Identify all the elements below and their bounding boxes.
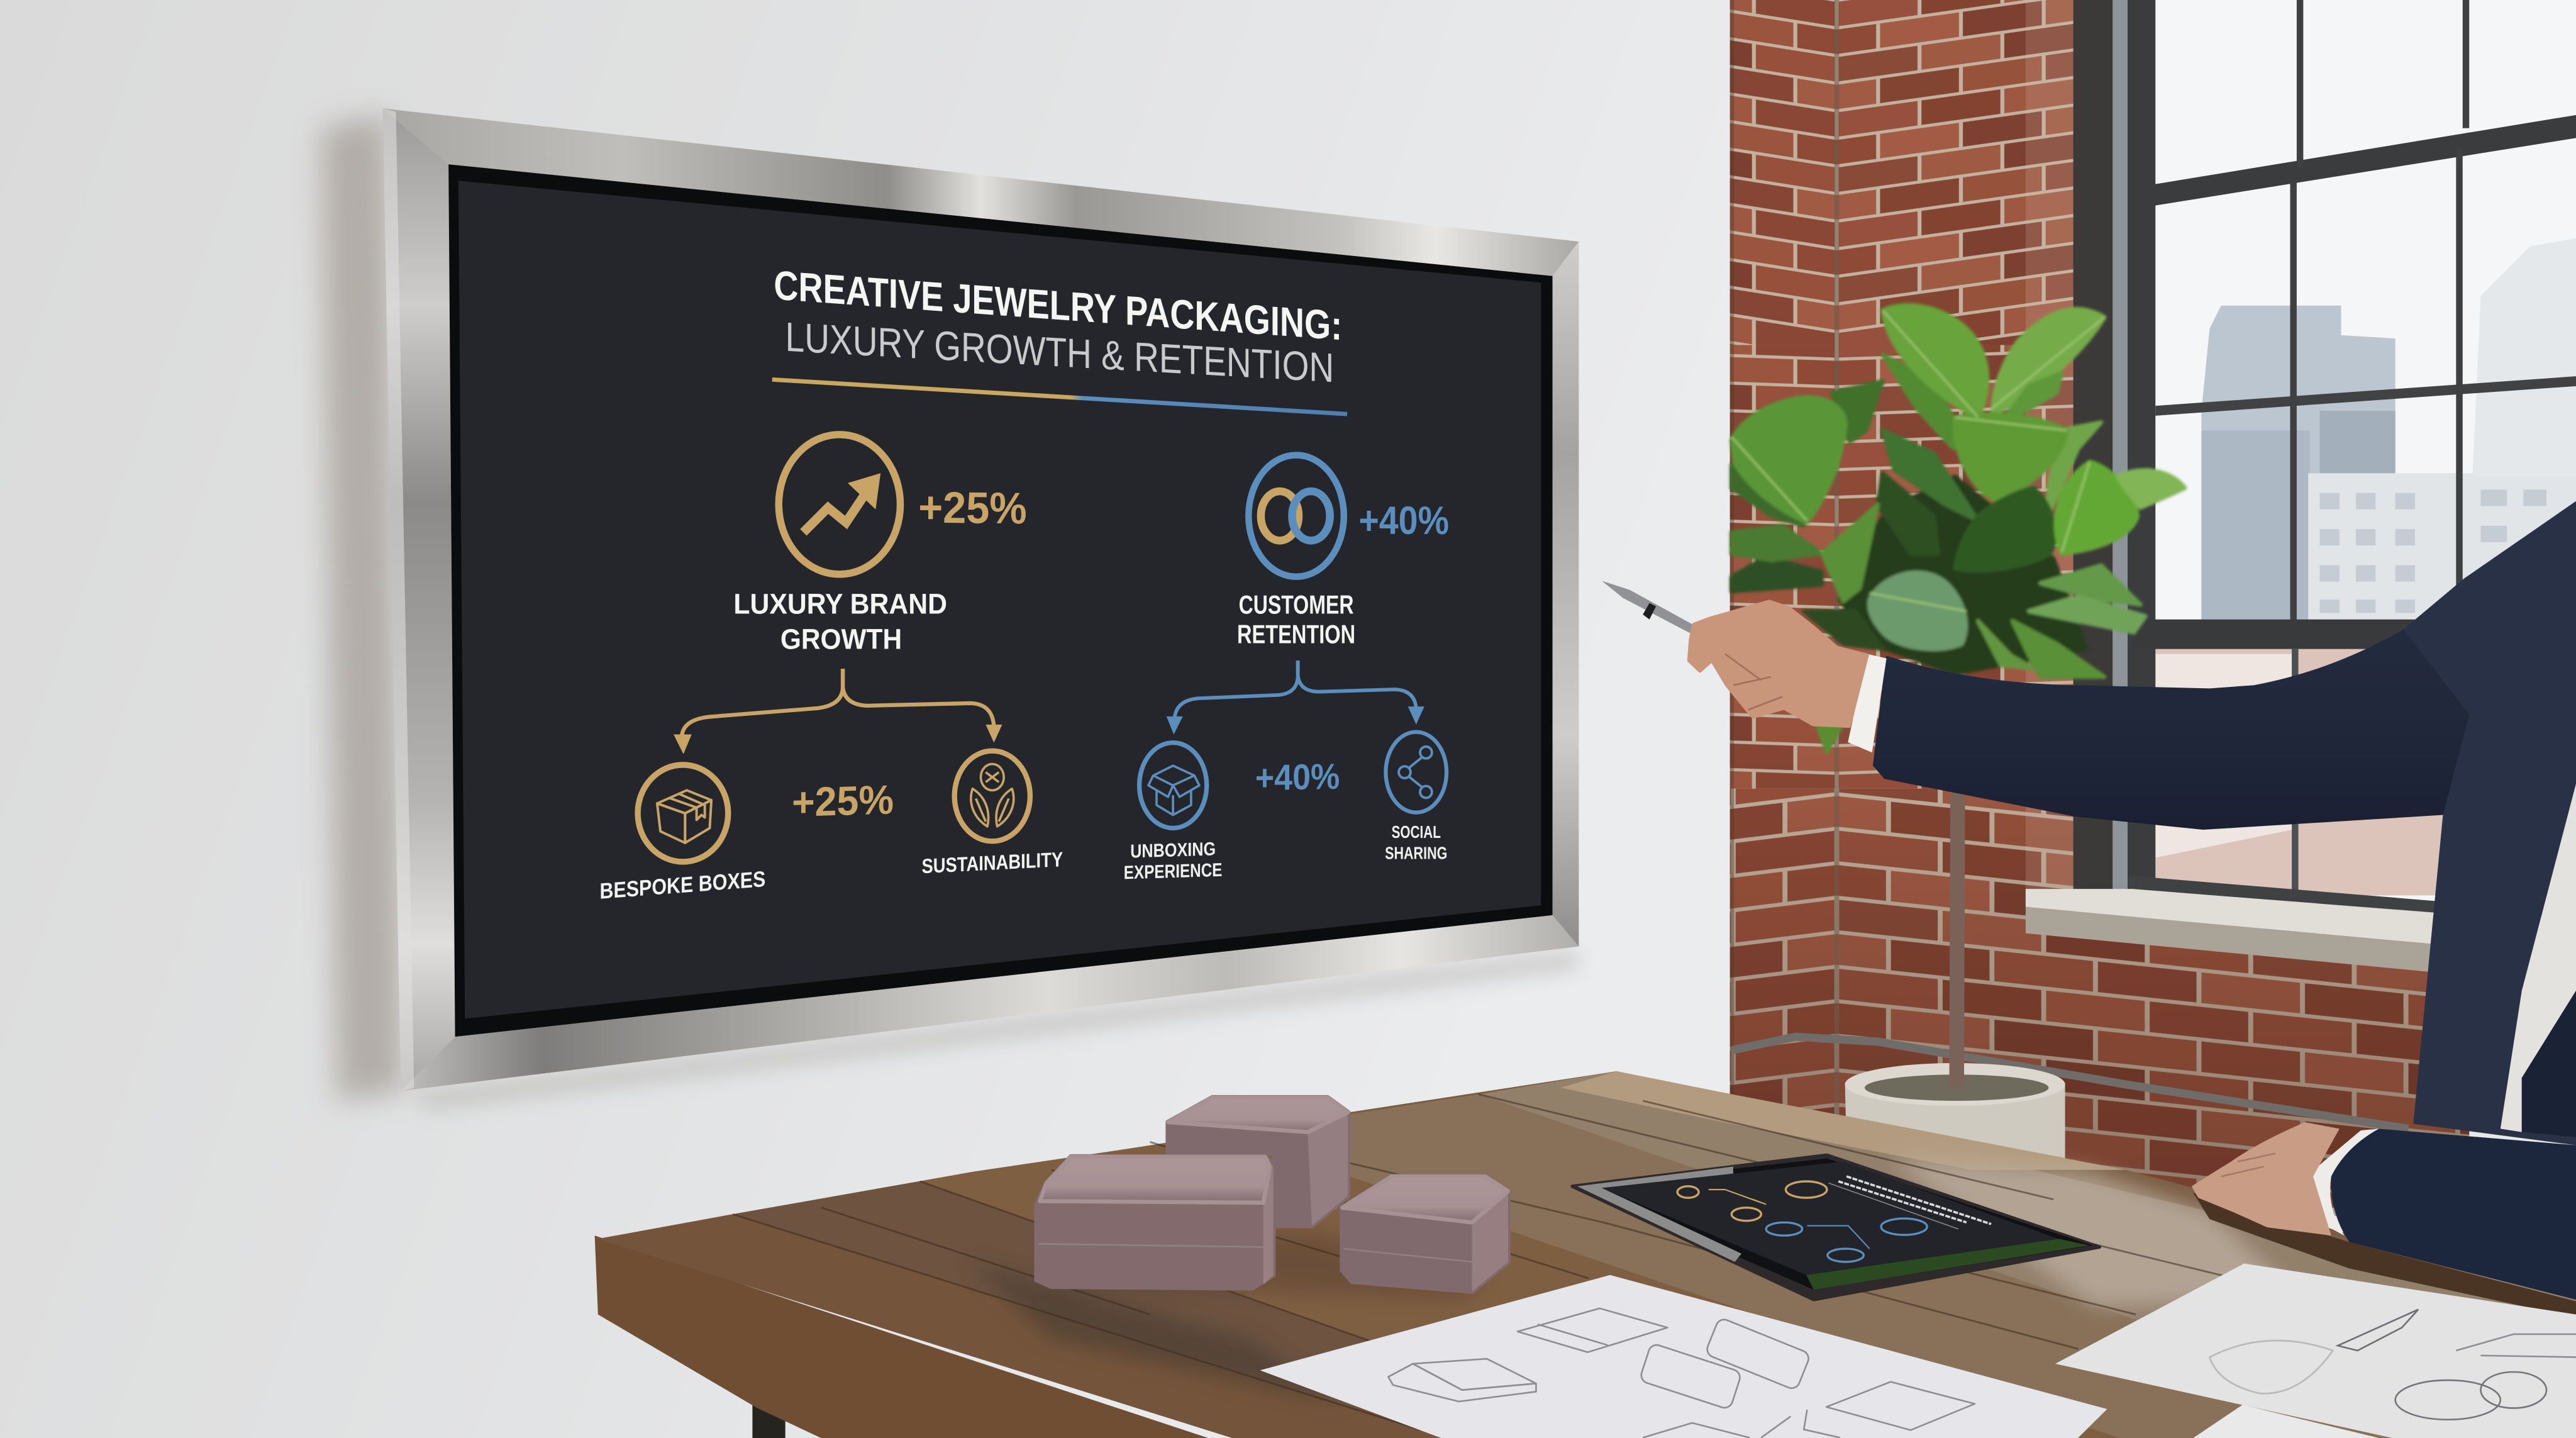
inner jacket lapel	[2522, 991, 2576, 1137]
design sketch sheet right	[2055, 1264, 2576, 1438]
window sill	[2026, 889, 2441, 945]
wall-mounted display	[383, 108, 1579, 1091]
arrows: blue branching connector	[1167, 660, 1424, 735]
resting hand	[2192, 1122, 2340, 1235]
stat: +40% lower: +40%	[1255, 757, 1340, 798]
lower cuff	[2310, 1129, 2379, 1235]
metal frame	[383, 108, 1579, 1091]
icon: interlocked rings in blue ring	[1248, 455, 1344, 577]
pen	[1602, 581, 1748, 664]
light weathered strip	[1561, 1071, 2126, 1170]
lower sleeve	[2331, 1129, 2576, 1300]
stat: +25% brand growth: +25%	[918, 482, 1027, 533]
upper cuff	[1848, 654, 1887, 752]
plant stem	[1957, 625, 1958, 1088]
sleeve pointing arm	[1873, 629, 2469, 830]
table top base	[598, 1071, 2576, 1438]
arrows: gold branching connector	[674, 669, 1002, 754]
thin glazing bars	[2155, 376, 2576, 416]
black bezel	[448, 164, 1553, 1037]
view below sash	[2146, 649, 2458, 896]
skyline buildings	[2201, 238, 2576, 625]
title: CREATIVE JEWELRY PACKAGING:	[774, 262, 1342, 348]
wall shadow of the frame	[322, 115, 404, 1101]
label: luxury brand growth: LUXURY BRAND	[733, 588, 947, 620]
label: luxury brand growth: GROWTH	[780, 623, 902, 655]
meeting rail top	[2136, 115, 2576, 209]
table front edge	[595, 1235, 1232, 1438]
label: customer retention: RETENTION	[1237, 620, 1355, 649]
white plaster wall	[0, 0, 1735, 1438]
icon: growth arrow in gold ring	[779, 435, 901, 574]
window	[2026, 0, 2576, 973]
icon: bespoke box	[638, 765, 728, 862]
stat: +40% customer retention: +40%	[1358, 499, 1449, 543]
label: social sharing: SHARING	[1385, 843, 1447, 862]
label: customer retention	[1237, 589, 1355, 649]
presenter jacket and body	[1848, 501, 2576, 1300]
tablet glass reflections	[1577, 1167, 1741, 1262]
fiddle leaf plant	[1731, 305, 2185, 752]
stat: +25% lower: +25%	[792, 776, 894, 825]
title: LUXURY GROWTH & RETENTION	[786, 314, 1334, 391]
wooden table	[595, 1071, 2576, 1438]
table planks	[598, 1214, 1446, 1438]
label: bespoke boxes: BESPOKE BOXES	[599, 867, 765, 904]
label: unboxing experience: EXPERIENCE	[1124, 860, 1223, 883]
shirt	[2501, 784, 2576, 1132]
lower meeting rail	[2133, 620, 2445, 649]
tablet screen icons	[1677, 1176, 1991, 1262]
package sketches	[1388, 1308, 1975, 1437]
label: sustainability: SUSTAINABILITY	[921, 847, 1063, 878]
dark wood near hand	[2193, 1193, 2576, 1318]
window reveal	[2074, 0, 2112, 891]
concrete lintel	[2026, 907, 2441, 973]
label: unboxing experience	[1124, 839, 1223, 883]
icon: unboxing	[1140, 743, 1207, 828]
tablet	[1572, 1155, 2099, 1300]
glass and sky	[2128, 0, 2576, 904]
title underline gold to blue	[772, 379, 1347, 414]
box back	[1168, 1098, 1348, 1226]
title	[774, 262, 1342, 391]
table leg	[752, 1388, 786, 1438]
label: customer retention: CUSTOMER	[1239, 589, 1353, 619]
box right	[1342, 1176, 1508, 1291]
design sketch sheet main	[1260, 1275, 2107, 1438]
tablet screen	[1602, 1162, 2058, 1275]
label: luxury brand growth	[733, 588, 947, 655]
pointing hand	[1689, 601, 1867, 726]
icon: sustainability leaves	[955, 751, 1030, 841]
icon: social sharing	[1385, 732, 1446, 813]
planter pot	[1845, 1063, 2065, 1160]
label: unboxing experience: UNBOXING	[1130, 839, 1216, 862]
pale weathered patch	[1889, 1158, 2300, 1307]
screen panel	[458, 181, 1541, 1018]
label: social sharing	[1385, 822, 1447, 862]
jacket body	[2404, 501, 2576, 1145]
brick wall	[1730, 0, 2469, 1216]
bottom rail	[2129, 876, 2448, 913]
sash side frame	[2128, 0, 2155, 896]
dark grain patch	[969, 1262, 1347, 1405]
box front	[1036, 1157, 1273, 1288]
label: social sharing: SOCIAL	[1392, 822, 1441, 842]
heating pipe	[1733, 1037, 2409, 1129]
velvet jewelry boxes	[1036, 1098, 1508, 1298]
